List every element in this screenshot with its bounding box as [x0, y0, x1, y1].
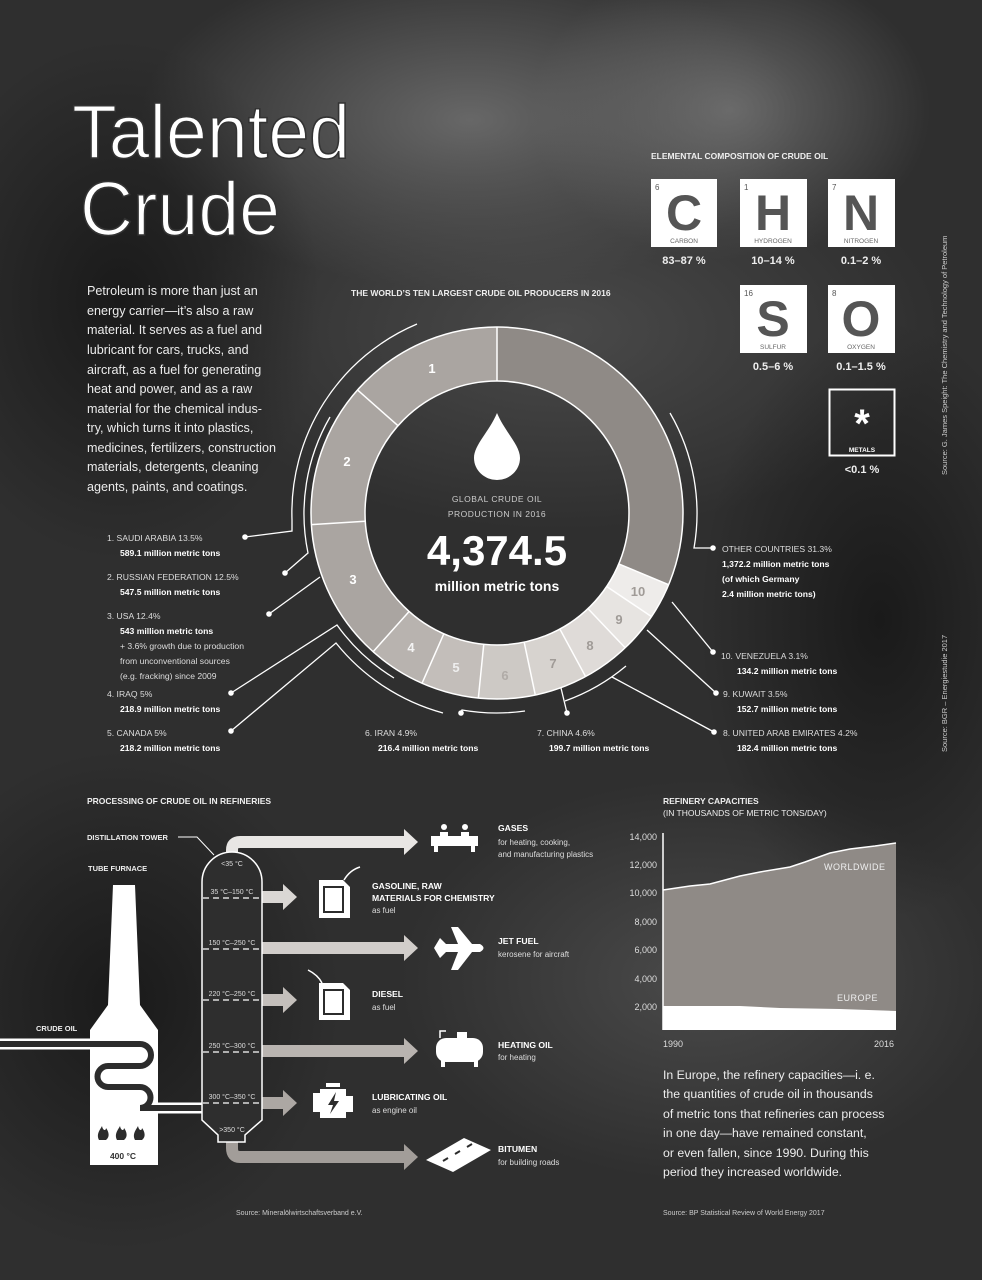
center text: global production: GLOBAL CRUDE OIL	[452, 494, 542, 504]
tube furnace	[0, 885, 204, 1165]
intro paragraph: try, which turns it into plastics,	[87, 421, 253, 435]
title: Crude	[80, 167, 280, 252]
tile: sulfur	[740, 285, 807, 373]
diagram labels: DISTILLATION TOWER	[87, 833, 169, 842]
producer labels: (of which Germany	[722, 574, 800, 584]
output arrows	[232, 829, 418, 1170]
distillation tower: 150 °C–250 °C	[209, 939, 255, 947]
refinery paragraph: In Europe, the refinery capacities—i. e.	[663, 1068, 875, 1082]
tile: oxygen: OXYGEN	[847, 344, 875, 351]
icon: heating oil tank	[436, 1031, 483, 1067]
tile: metals: <0.1 %	[845, 464, 879, 476]
tile: nitrogen: N	[843, 185, 879, 241]
area chart: refinery capacities: 2,000	[634, 1002, 657, 1012]
product labels: for heating	[498, 1053, 536, 1062]
tile: nitrogen: NITROGEN	[844, 238, 878, 245]
producer labels: 8. UNITED ARAB EMIRATES 4.2%	[723, 728, 858, 738]
center text: global production: PRODUCTION IN 2016	[448, 509, 546, 519]
intro paragraph: material for the chemical indus-	[87, 402, 262, 416]
donut chart: producers: 4	[407, 640, 415, 655]
producer labels: 2.4 million metric tons)	[722, 589, 816, 599]
donut chart: producers: 8	[586, 638, 594, 653]
intro paragraph: heat and power, and as a raw	[87, 382, 253, 396]
product labels: DIESEL	[372, 989, 403, 999]
tile: nitrogen: 0.1–2 %	[841, 255, 881, 267]
producer labels: 6. IRAN 4.9%	[365, 728, 417, 738]
area chart: refinery capacities: 4,000	[634, 974, 657, 984]
refinery diagram	[0, 823, 593, 1172]
producer labels: 10. VENEZUELA 3.1%	[721, 651, 808, 661]
tile: metals: *	[854, 402, 870, 446]
area chart: refinery capacities: 12,000	[629, 860, 657, 870]
intro paragraph	[87, 284, 276, 494]
product labels: as engine oil	[372, 1106, 417, 1115]
product labels: BITUMEN	[498, 1144, 537, 1154]
producer labels: (e.g. fracking) since 2009	[120, 671, 217, 681]
tile: carbon: CARBON	[670, 238, 698, 245]
tile: oxygen: 0.1–1.5 %	[836, 361, 886, 373]
product labels: JET FUEL	[498, 936, 539, 946]
intro paragraph: aircraft, as a fuel for generating	[87, 363, 261, 377]
intro paragraph: materials, detergents, cleaning	[87, 460, 259, 474]
source: refineries: Source: Mineralölwirtschaftsverband e.V.	[236, 1210, 363, 1217]
diagram labels	[36, 833, 169, 1033]
product labels: GASES	[498, 823, 528, 833]
area chart: refinery capacities: EUROPE	[837, 993, 878, 1003]
donut chart: producers: 1	[428, 361, 436, 376]
distillation tower: 35 °C–150 °C	[211, 888, 253, 896]
refinery paragraph: of metric tons that refineries can process	[663, 1107, 884, 1121]
title: Talented	[72, 90, 350, 175]
producer labels: 199.7 million metric tons	[549, 743, 650, 753]
donut chart: producers: 3	[349, 572, 357, 587]
intro paragraph: agents, paints, and coatings.	[87, 480, 247, 494]
intro paragraph: Petroleum is more than just an	[87, 284, 258, 298]
producer labels	[107, 533, 858, 753]
element tiles	[651, 179, 895, 476]
donut chart: producers: 6	[501, 668, 509, 683]
producer labels: from unconventional sources	[120, 656, 230, 666]
heading: processing: PROCESSING OF CRUDE OIL IN REFINERIES	[87, 796, 271, 806]
refinery paragraph: in one day—have remained constant,	[663, 1126, 867, 1140]
source: producers (vertical): Source: BGR – Energiestudie 2017	[940, 635, 949, 752]
producer labels: 1,372.2 million metric tons	[722, 559, 830, 569]
product labels: MATERIALS FOR CHEMISTRY	[372, 893, 495, 903]
icon: diesel can	[308, 970, 350, 1020]
heading: producers: THE WORLD’S TEN LARGEST CRUDE OIL PRODUCERS IN 2016	[351, 288, 611, 298]
icon: airplane	[434, 927, 484, 970]
icon: oil drop	[474, 413, 520, 480]
tile: sulfur: 0.5–6 %	[753, 361, 793, 373]
tile: sulfur: SULFUR	[760, 344, 786, 351]
tile: hydrogen: 1	[744, 183, 749, 192]
center text: global production: million metric tons	[435, 578, 559, 594]
product labels: for heating, cooking,	[498, 838, 570, 847]
icon: gasoline can	[319, 867, 360, 918]
product labels: HEATING OIL	[498, 1040, 553, 1050]
distillation tower: 300 °C–350 °C	[209, 1093, 255, 1101]
tile: hydrogen: 10–14 %	[751, 255, 795, 267]
tile: carbon: C	[666, 185, 702, 241]
product labels: and manufacturing plastics	[498, 850, 593, 859]
area chart: refinery capacities: 1990	[663, 1039, 683, 1049]
area chart: refinery capacities: 6,000	[634, 945, 657, 955]
producer labels: 218.9 million metric tons	[120, 704, 221, 714]
product labels: kerosene for aircraft	[498, 950, 570, 959]
producer labels: 547.5 million metric tons	[120, 587, 221, 597]
intro paragraph: lubricant for cars, trucks, and	[87, 343, 249, 357]
donut chart: producers: 10	[631, 584, 645, 599]
donut chart: producers: 9	[615, 612, 623, 627]
area chart: refinery capacities: 14,000	[629, 832, 657, 842]
icon: road	[426, 1138, 491, 1172]
product labels: for building roads	[498, 1158, 559, 1167]
tile: sulfur: 16	[744, 289, 753, 298]
producer labels: 7. CHINA 4.6%	[537, 728, 595, 738]
donut chart: producers: 5	[452, 660, 460, 675]
producer labels: 3. USA 12.4%	[107, 611, 161, 621]
icon: gas stove	[431, 824, 478, 852]
heading: elemental composition: ELEMENTAL COMPOSITION OF CRUDE OIL	[651, 151, 828, 161]
refinery paragraph	[663, 1068, 884, 1179]
intro paragraph: medicines, fertilizers, construction	[87, 441, 276, 455]
producer labels: 589.1 million metric tons	[120, 548, 221, 558]
producer labels: 4. IRAQ 5%	[107, 689, 153, 699]
tile: carbon: 6	[655, 183, 660, 192]
producer labels: 218.2 million metric tons	[120, 743, 221, 753]
product labels: LUBRICATING OIL	[372, 1092, 447, 1102]
distillation tower	[202, 852, 262, 1142]
area chart: refinery capacities: WORLDWIDE	[824, 862, 886, 872]
distillation tower: 250 °C–300 °C	[209, 1042, 255, 1050]
tube furnace: 400 °C	[110, 1151, 136, 1161]
tile: hydrogen: HYDROGEN	[754, 238, 792, 245]
source: BP: Source: BP Statistical Review of World Energy 2017	[663, 1210, 825, 1217]
producer labels: 1. SAUDI ARABIA 13.5%	[107, 533, 203, 543]
center text: global production	[427, 494, 567, 594]
area chart: refinery capacities	[629, 832, 896, 1049]
heading: refinery capacities: (IN THOUSANDS OF METRIC TONS/DAY)	[663, 808, 827, 818]
tile: metals: METALS	[849, 447, 876, 454]
diagram labels: TUBE FURNACE	[88, 864, 147, 873]
product labels: as fuel	[372, 1003, 396, 1012]
leader lines and brackets	[231, 324, 716, 732]
donut chart: producers	[311, 327, 683, 699]
tile: metals	[830, 390, 894, 476]
tile: hydrogen: H	[755, 185, 791, 241]
producer labels: 2. RUSSIAN FEDERATION 12.5%	[107, 572, 239, 582]
product labels: as fuel	[372, 906, 396, 915]
tile: sulfur: S	[756, 291, 790, 347]
distillation tower: <35 °C	[221, 860, 243, 868]
intro paragraph: material. It serves as a fuel and	[87, 323, 262, 337]
producer labels: OTHER COUNTRIES 31.3%	[722, 544, 832, 554]
tile: nitrogen	[828, 179, 895, 267]
diagram labels: CRUDE OIL	[36, 1024, 78, 1033]
refinery paragraph: the quantities of crude oil in thousands	[663, 1087, 873, 1101]
area chart: refinery capacities: 10,000	[629, 888, 657, 898]
tile: oxygen: O	[842, 291, 880, 347]
tile: nitrogen: 7	[832, 183, 837, 192]
tile: oxygen: 8	[832, 289, 837, 298]
refinery paragraph: or even fallen, since 1990. During this	[663, 1146, 869, 1160]
producer labels: 5. CANADA 5%	[107, 728, 167, 738]
producer labels: 543 million metric tons	[120, 626, 213, 636]
tile: oxygen	[828, 285, 895, 373]
tile: carbon: 83–87 %	[662, 255, 706, 267]
distillation tower: 220 °C–250 °C	[209, 990, 255, 998]
donut chart: producers: 7	[549, 656, 557, 671]
center text: global production: 4,374.5	[427, 527, 567, 574]
producer labels: 9. KUWAIT 3.5%	[723, 689, 788, 699]
distillation tower: >350 °C	[219, 1126, 245, 1134]
tile: hydrogen	[740, 179, 807, 267]
area chart: refinery capacities: 8,000	[634, 917, 657, 927]
product labels: GASOLINE, RAW	[372, 881, 443, 891]
title	[72, 90, 350, 252]
producer labels: 182.4 million metric tons	[737, 743, 838, 753]
donut chart: producers: 2	[343, 454, 351, 469]
heading: refinery capacities: REFINERY CAPACITIES	[663, 796, 759, 806]
product labels	[372, 823, 593, 1167]
producer labels: + 3.6% growth due to production	[120, 641, 244, 651]
producer labels: 152.7 million metric tons	[737, 704, 838, 714]
intro paragraph: energy carrier—it’s also a raw	[87, 304, 254, 318]
heading: refinery capacities	[663, 796, 827, 818]
area chart: refinery capacities: 2016	[874, 1039, 894, 1049]
icon: engine	[313, 1083, 353, 1118]
producer labels: 216.4 million metric tons	[378, 743, 479, 753]
source: composition (vertical): Source: G. James Speight: The Chemistry and Technology of Petroleum	[940, 236, 949, 475]
tile: carbon	[651, 179, 717, 267]
refinery paragraph: period they increased worldwide.	[663, 1165, 842, 1179]
producer labels: 134.2 million metric tons	[737, 666, 838, 676]
